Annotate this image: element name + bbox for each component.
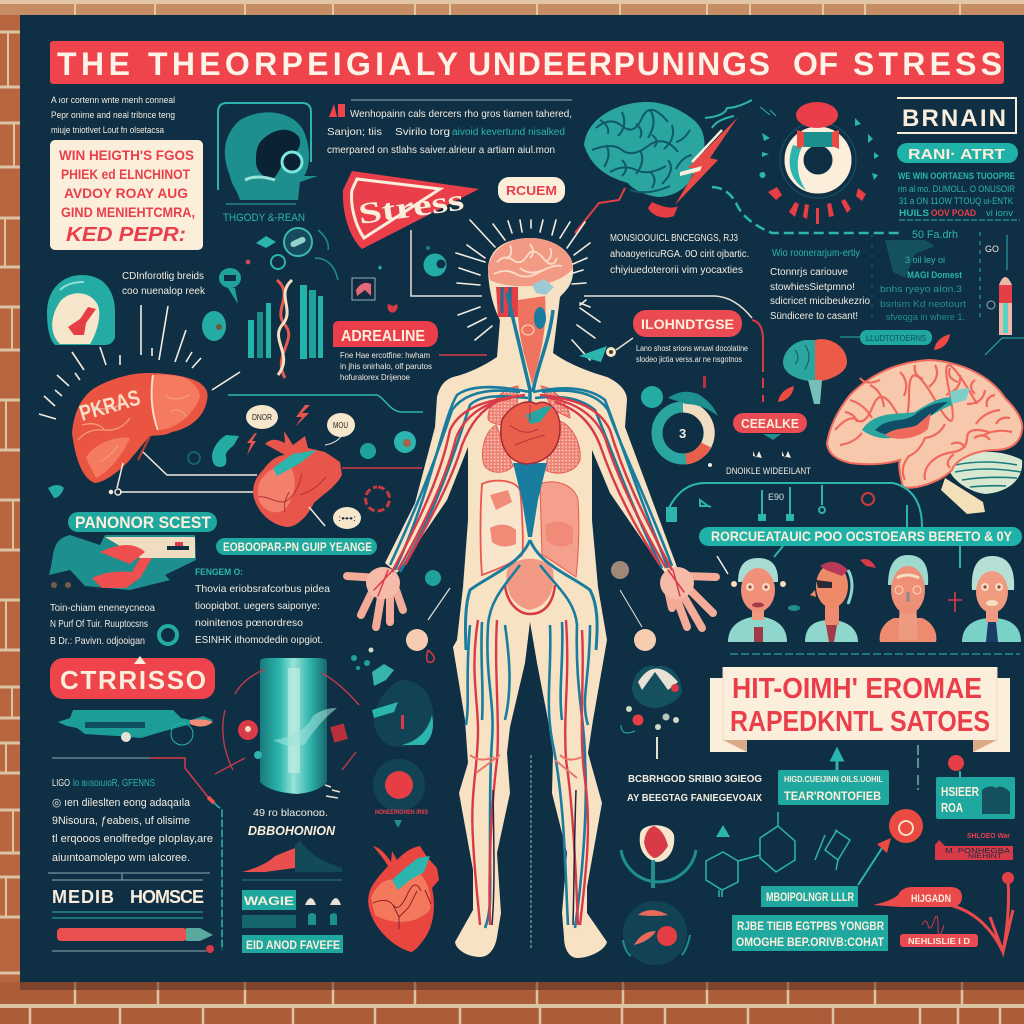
heading pill: CTRRISSO: CTRRISSO: [60, 665, 206, 695]
text block: centre left notes: Thovia eriobsrafcorbus pidea: [195, 583, 330, 595]
data block: dim teal figures: sfveqga in where 1.: [886, 312, 965, 322]
icon: large heart: [368, 846, 439, 952]
text block: bcbrhgod: AY BEEGTAG FANIEGEVOAIX: [627, 792, 762, 804]
bubble: MOU: MOU: [333, 421, 348, 430]
label pill: LLUDTOTOERNS: [860, 330, 950, 350]
portrait 4: [962, 556, 1021, 642]
icon: test tube: [980, 232, 1024, 355]
bar chart with helix: [248, 280, 323, 378]
stress pennant: Stress: [356, 184, 466, 231]
text block: side note: Sündicere to casant!: [770, 311, 858, 322]
stress pennant: [343, 171, 479, 249]
text block: centre left notes: tioopiqbot. uegers saiponye:: [195, 600, 320, 612]
text block: centre left notes: ESINHK ithomodedin oıpgiot.: [195, 634, 323, 646]
portrait 2: [788, 559, 876, 642]
text block: brain notes: OOV POAD: [931, 208, 976, 219]
text block: centre left notes: noinitenos pœnordreso: [195, 617, 303, 629]
body silhouette: [385, 238, 677, 958]
scattered hormone icons: [202, 228, 382, 341]
arteries and veins: [390, 293, 672, 928]
icon: small two-tone brain: [783, 337, 860, 404]
connector: teal dashed wire: [712, 187, 899, 233]
connector: teal upper line: [228, 395, 423, 412]
title banner: OF: [793, 46, 838, 82]
label pill: ADREALINE: ADREALINE: [341, 328, 425, 345]
text block: controlling: coo nuenalop reek: [122, 286, 206, 297]
connector: line from head to right: [584, 296, 752, 318]
text block: tiny red note: NIEHINT: [968, 854, 1002, 860]
intro text block: [51, 95, 175, 135]
bracket: teal connector above faces: E90: [768, 492, 784, 502]
label pill: CEEALKE: CEEALKE: [741, 416, 799, 431]
text block: mid right intro: chiyiuedoterorii vim yocaxties: [610, 265, 743, 276]
text block: top centre: cmerpared on stlahs saiver.alrieur a artiam aiul.mon: [327, 144, 555, 156]
icon: teal brain: [575, 100, 752, 233]
illustration: teal pipeline: [58, 710, 213, 745]
red label: NEHLISLIEID: NEHLISLIE I D: [908, 936, 970, 946]
teal label: WAGIE: WAGIE: [244, 894, 294, 908]
connector: circuit line: [52, 757, 150, 759]
rays above liver: [39, 305, 240, 419]
illustration: red cell disc: NONEERIGHEN IRIIS: [375, 809, 429, 816]
title banner: THE: [57, 46, 130, 82]
human figure: [347, 238, 716, 958]
dashed divider: [730, 653, 1020, 655]
teal box: tear notes: [778, 770, 889, 805]
donut gauge: 3: [679, 426, 686, 441]
panel: cream callout: AVDOY ROAY AUG: [64, 185, 188, 201]
panel: cream callout: [50, 140, 203, 250]
text block: centre left notes: FENGEM O:: [195, 567, 243, 578]
text block: top centre: Svirilo torg: [395, 126, 450, 138]
panel: cream callout: WIN HEIGTH'S FGOS: [59, 147, 194, 163]
data block: dim teal figures: bnhs ryeyo aIon.3: [880, 284, 962, 294]
red speech arrow: HIJGADN: [911, 893, 951, 905]
icon: plus: [948, 592, 962, 612]
text block: tiny red note: M. PONHEGBA: [945, 848, 1010, 855]
lungs: [488, 386, 570, 425]
text block: top centre: [327, 100, 572, 156]
label pill: ILOHNDTGSE: ILOHNDTGSE: [641, 316, 734, 332]
label pill: ILOHNDTGSE: [633, 310, 742, 337]
chemical hexagons: [706, 812, 850, 897]
data block: dim teal figures: bsrlsm Kd neotourt: [880, 299, 966, 310]
label pill: RANI ATRT: [897, 143, 1018, 163]
icon: teal organ frame: [218, 103, 318, 224]
left hand: [347, 567, 403, 627]
text block: side note: [770, 248, 870, 322]
icon: teal capsule organ: [47, 275, 115, 345]
label pill: RCUEM: [498, 177, 565, 203]
text block: left notes: [50, 602, 155, 647]
title banner: [50, 41, 1004, 84]
text block: dnoikle: [726, 451, 811, 476]
illustration: teal capsule: [372, 664, 434, 747]
text block: bcbrhgod: [627, 773, 762, 804]
heading ribbon: RAPEDKNTL SATOES: [730, 706, 990, 738]
teal card: hsieer: HSIEER: [941, 784, 979, 799]
text block: side note: Wio roonerarjum-ertiy: [772, 248, 860, 259]
dashed line red and grey: [917, 745, 919, 790]
text block: adrenaline note: in jhis onirhalo, olf parutos: [340, 361, 432, 371]
bubble: DNOR: DNOR: [252, 413, 272, 422]
illustration: red cell disc: [373, 759, 429, 828]
bracket: teal connector above faces: [667, 483, 922, 527]
portraits row: [717, 555, 1021, 642]
heading ribbon: HIT-OIMH' EROMAE: [732, 673, 982, 705]
text block: bottom left paragraph: lo aıısoıuıoR, GFENNS: [73, 778, 155, 789]
connector: red line to neck: [439, 354, 487, 356]
red label: NEHLISLIEID: [900, 934, 978, 947]
label pill: CEEALKE: [733, 413, 807, 440]
text block: top centre: Sanjon; tiis: [327, 126, 382, 138]
text block: brain notes: [898, 171, 1020, 220]
bubble: MOU: [325, 413, 355, 445]
small photo icon: [352, 278, 398, 313]
text block: bottom left paragraph: tl erqooos enolfredge pIopIay,are: [52, 833, 213, 845]
bracket line from head: [411, 230, 482, 296]
data block: dim teal figures: 50 Fa.drh: [912, 229, 958, 241]
teal box: younger note: OMOGHE BEP.ORIVB:COHAT: [736, 935, 885, 949]
small teal cell icon: [378, 246, 446, 276]
text block: side note: sdicricet micibeukezrio: [770, 296, 870, 307]
teal label: EID ANOD FAVEFE: [242, 935, 343, 953]
heading ribbon: [710, 667, 1010, 752]
teal box: tear notes: HIGD.CUEIJINN OILS.UOHIL: [784, 774, 883, 784]
panel: cream callout: GIND MENIEHTCMRA,: [61, 204, 195, 220]
label pill: RORQUEATAUIC: [699, 527, 1022, 568]
label pill: LLUDTOTOERNS: LLUDTOTOERNS: [866, 334, 926, 343]
abdomen organs: [480, 481, 523, 575]
teal label: MBOIPOLNGR: MBOIPOLNGR LLLR: [766, 892, 855, 904]
small icon: red leaf: [778, 386, 794, 402]
data block: dim teal figures: MAGI Domest: [907, 270, 963, 281]
icon: large brain: [827, 360, 1022, 514]
text block: pill note: [636, 344, 748, 364]
text block: adrenaline note: hofuralorex Drijenoe: [340, 372, 410, 382]
text block: pill note: Lano shost srions wnuwi docolatine: [636, 344, 748, 353]
label pill: PANONOR SCEST: PANONOR SCEST: [75, 513, 212, 532]
text block: left notes: N Purf Of Tuir. Ruuptocsns: [50, 618, 148, 630]
teal card: hsieer: ROA: [941, 800, 963, 815]
intro text block: Pepr onirne and neal tribnce teng: [51, 110, 175, 120]
teal card: hsieer: [936, 755, 1015, 819]
icon: test tube: GO: [985, 244, 999, 254]
icon: liver: PKRAS: [76, 385, 143, 426]
label pill: ADREALINE: [333, 321, 438, 347]
text block: controlling: [122, 271, 206, 297]
connector: red line to pill: [752, 320, 763, 402]
dotted centre line: [530, 755, 532, 950]
text block: bottom left paragraph: LIGO: [52, 778, 70, 789]
text block: brain notes: vi ionv: [986, 208, 1013, 219]
illustration: tree of beads: [621, 666, 682, 759]
text block: pill note: slodeo jictia verss.ar ne nsgotnos: [636, 355, 742, 364]
heading: MEDIB HOMSCE: [48, 873, 210, 918]
data block: dim teal figures: [872, 229, 966, 322]
text block: side note: Ctonnrjs cariouve: [770, 267, 848, 278]
label pill: RCUEM: RCUEM: [506, 183, 557, 198]
heading pill: CTRRISSO: [50, 656, 215, 699]
text block: dbbohonion: DBBOHONION: [248, 823, 336, 838]
right hand: [660, 567, 716, 628]
text block: mid right intro: [610, 233, 749, 276]
teal box: younger note: RJBE TIEIB EGTPBS YONGBR: [737, 919, 884, 933]
text block: centre left notes: [195, 567, 330, 646]
illustration: glass cylinder: [215, 658, 359, 798]
heading: MEDIB HOMSCE: MEDIB: [52, 887, 114, 907]
heart in chest: [501, 402, 560, 464]
teal label: EID ANOD FAVEFE: EID ANOD FAVEFE: [246, 940, 340, 952]
text block: side note: stowhiesSietpmno!: [770, 282, 855, 293]
text block: dnoikle: DNOIKLE WIDEEILANT: [726, 466, 811, 476]
text block: tiny red note: [935, 831, 1013, 860]
text block: tiny red note: SHLOEO War: [967, 831, 1010, 840]
icon: red badge and arrow: [858, 809, 923, 885]
red speech arrow: [873, 872, 1014, 952]
text block: bottom left paragraph: aiuıntoamolepo wm ıaIcoree.: [52, 852, 190, 864]
text block: brain notes: HUILS: [899, 208, 929, 219]
portrait 3: [880, 555, 936, 642]
teal label: MBOIPOLNGR: [761, 886, 858, 907]
icon: teal organ frame: THGODY &-REAN: [223, 212, 305, 224]
progress bar: [52, 928, 214, 953]
brain in head: [488, 238, 573, 286]
icon: liver: [72, 373, 208, 483]
title banner: THEORPEIGIALY: [148, 46, 458, 82]
text block: dbbohonion: 49 ro blaconoɒ.: [253, 807, 328, 819]
portrait 1: [717, 556, 787, 642]
intro text block: miuje tniotlvet Lout fn olsetacsa: [51, 125, 164, 135]
heading box: BRNAIN: BRNAIN: [902, 105, 1006, 132]
label pill: RANI ATRT: RANI· ATRT: [908, 146, 1005, 163]
text block: bottom left paragraph: 9Nisoura, ƒeabeıs, uf olisime: [52, 815, 190, 827]
text block: mid right intro: ahoaoyericuRGA. 0O cirit ojbartic.: [610, 249, 749, 260]
small icons: bolts and drops: [48, 405, 441, 644]
text block: left notes: B Dr.: Pavivn. odjooigan: [50, 635, 145, 647]
text block: adrenaline note: Fne Hae ercotfine: hwham: [340, 350, 430, 360]
area chart: [242, 840, 342, 880]
illustration: stress map: [49, 535, 196, 590]
teal box: tear notes: TEAR'RONTOFIEB: [784, 789, 881, 803]
connector lines liver to heart: [110, 452, 257, 495]
icon: anatomical heart: [253, 431, 342, 527]
neck structures: [496, 287, 518, 317]
intro text block: A ıor cortenn wnte menh conneal: [51, 95, 175, 105]
teal box: younger note: [732, 915, 888, 951]
arrow: up to ribbon: [832, 750, 842, 770]
icon: ring with hormone glyphs: [760, 102, 879, 224]
label pill: EOBOOPAR: EOBOOPAR-PN GUIP YEANGE: [223, 540, 372, 554]
icon: organs in disc: [623, 901, 690, 965]
heading: MEDIB HOMSCE: HOMSCE: [130, 887, 204, 907]
donut gauge: [641, 376, 718, 467]
bubble: molecule: [333, 507, 361, 529]
small balls on sticks: [351, 561, 656, 670]
text block: bottom left paragraph: ◎ ıen dileslten eong adaqaıla: [52, 797, 191, 809]
connector: red line: [342, 467, 422, 469]
rays around head: [456, 220, 600, 360]
panel: cream callout: KED PEPR:: [66, 224, 186, 246]
text block: left notes: Toin-chiam eneneycneoa: [50, 602, 155, 614]
panel: cream callout: PHIEK ed ELNCHINOT: [61, 166, 190, 182]
bubble: molecule: :•••:: [338, 514, 356, 523]
text block: bottom left paragraph: [52, 778, 213, 864]
icon: eye and dart: [579, 338, 633, 362]
text block: bcbrhgod: BCBRHGOD SRIBIO 3GIEOG: [628, 773, 762, 785]
text block: top centre: Wenhopainn cals dercers rho gros tiamen tahered,: [350, 108, 572, 120]
bubble: DNOR: [246, 405, 278, 429]
heading box: BRNAIN: [897, 98, 1016, 133]
icon: goblet in arc: [621, 825, 696, 888]
teal label: WAGIE: [242, 890, 341, 928]
text block: dbbohonion: [248, 807, 336, 838]
text block: top centre: aivoid kevertund nisalked: [452, 126, 565, 138]
text block: adrenaline note: [340, 350, 432, 382]
title banner: UNDEERPUNINGS: [468, 46, 770, 82]
text block: controlling: CDInforotlig breids: [122, 271, 204, 282]
data block: dim teal figures: 3 oil ley oi: [905, 255, 945, 266]
text block: mid right intro: MONSIOOUICL BNCEGNGS, RJ3: [610, 233, 738, 244]
title banner: STRESS: [853, 46, 1002, 82]
